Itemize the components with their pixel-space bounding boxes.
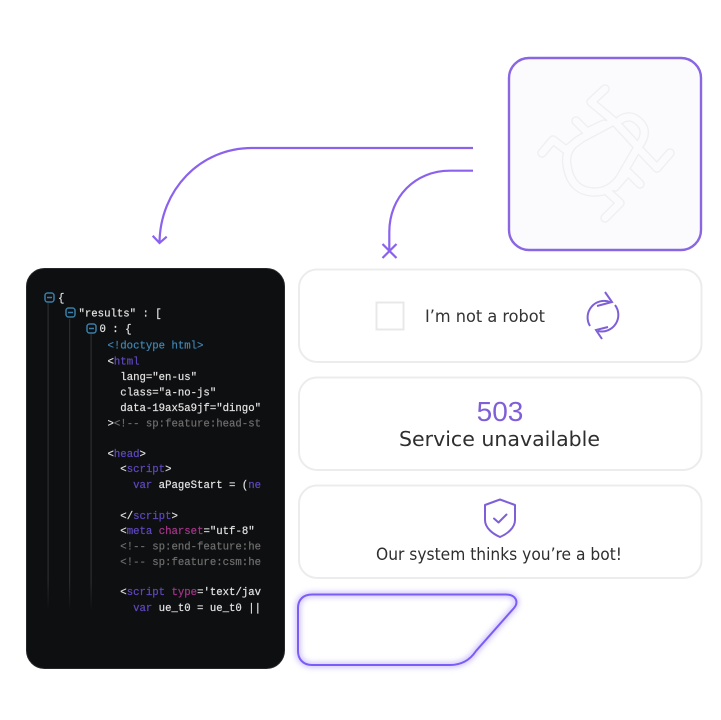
code text: data-19ax5a9jf="dingo" [120,403,261,415]
panel: bug box [509,58,701,250]
glowing empty input shape [298,594,516,665]
arrow: curved line to code panel [153,148,473,243]
code text: var aPageStart = (ne [133,480,261,492]
code text: <!-- sp:end-feature:he [120,542,261,554]
code text [58,293,262,615]
text: 503: 503 [477,396,523,427]
icon: bug [542,89,670,218]
checkbox [376,302,404,330]
icon: refresh arrows [588,292,618,339]
arrow: blocked curved line to captcha card [382,171,473,258]
code text: class="a-no-js" [120,388,216,400]
code text: <meta charset="utf-8" [120,526,255,538]
code text: </script> [120,511,178,523]
icon: shield check [485,500,515,537]
code text: <script> [120,464,171,476]
code text: <!-- sp:feature:csm:he [120,557,261,569]
code text: ><!-- sp:feature:head-st [108,418,261,430]
text: bot warning: Our system thinks you’re a bot! [376,545,622,564]
panel: bot warning card [299,486,702,578]
panel: captcha card [299,270,702,362]
collapse toggles [45,293,96,333]
tree guide lines [48,303,92,611]
code text: var ue_t0 = ue_t0 || [133,603,261,615]
text: I'm not a robot: I’m not a robot [425,307,545,327]
code text: "results" : [ [78,308,162,320]
code text: <html [108,356,140,368]
panel: 503 card [299,378,702,470]
text: Service unavailable: Service unavailable [399,427,600,451]
code text: <head> [108,449,146,461]
code text: lang="en-us" [120,372,197,384]
code text: <!doctype html> [108,340,203,352]
code text: { [58,293,64,305]
code text: 0 : { [100,324,131,336]
panel: code window [26,268,284,668]
code text: <script type='text/jav [120,587,262,599]
